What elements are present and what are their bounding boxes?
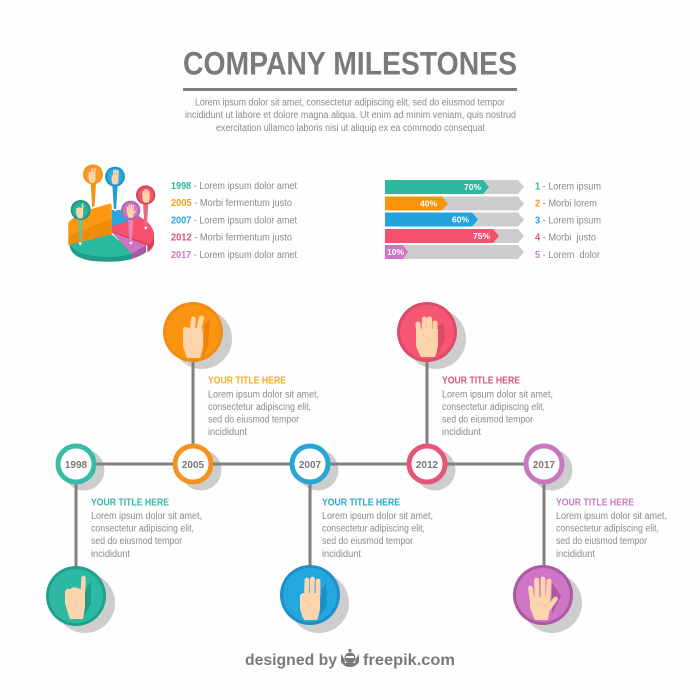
- text block 2005: [208, 376, 319, 438]
- bar label 3: 3 - Lorem ipsum: [535, 216, 601, 226]
- text block 2012: Lorem ipsum dolor sit amet,: [442, 390, 553, 400]
- pin: purple: [121, 201, 140, 245]
- bar 75%: 75%: [473, 231, 490, 241]
- bar label 1: 1 - Lorem ipsum: [535, 182, 601, 192]
- text block 1998: consectetur adipiscing elit,: [91, 524, 194, 534]
- heading 2017: YOUR TITLE HERE: [556, 498, 634, 508]
- pie slice: pink: [112, 217, 154, 252]
- progress bars: [385, 180, 524, 259]
- text block 2017: incididunt: [556, 549, 595, 560]
- icon: pink hand, four fingers: [397, 302, 457, 362]
- intro paragraph: exercitation ullamco laboris nisi ut aliquip ex ea commodo consequat: [216, 123, 485, 134]
- text block 2007: sed do eiusmod tempor: [322, 536, 414, 547]
- text block 2017: sed do eiusmod tempor: [556, 536, 648, 547]
- text block 2007: [322, 498, 433, 560]
- legend row 1998: 1998 - Lorem ipsum dolor amet: [171, 181, 297, 192]
- intro paragraph: Lorem ipsum dolor sit amet, consectetur adipiscing elit, sed do eiusmod tempor: [195, 98, 506, 108]
- text block 2007: incididunt: [322, 549, 361, 560]
- text block 1998: Lorem ipsum dolor sit amet,: [91, 511, 202, 522]
- milestone 2007 node: 2007: [299, 460, 322, 471]
- milestone 2017 node: [526, 446, 562, 482]
- text block 2005: Lorem ipsum dolor sit amet,: [208, 390, 319, 400]
- milestone 2005 node: 2005: [182, 460, 205, 471]
- legend row 2012: 2012 - Morbi fermentum justo: [171, 232, 293, 244]
- timeline lines: [76, 355, 544, 572]
- icon: orange hand, two fingers: [163, 302, 223, 362]
- bar 40%: 40%: [420, 198, 437, 208]
- milestone 2017 node: 2017: [533, 460, 556, 471]
- legend row 2007: 2007 - Lorem ipsum dolor amet: [171, 216, 297, 226]
- text block 2005: consectetur adipiscing elit,: [208, 402, 311, 413]
- text block 2007: consectetur adipiscing elit,: [322, 524, 425, 534]
- milestone 2012 node: 2012: [416, 460, 439, 471]
- text block 1998: sed do eiusmod tempor: [91, 536, 183, 547]
- pie slice: blue: [112, 210, 141, 226]
- text block 2005: incididunt: [208, 427, 247, 438]
- heading 2012: YOUR TITLE HERE: [442, 376, 520, 386]
- heading 2007: YOUR TITLE HERE: [322, 498, 400, 508]
- circle drop shadows: [55, 309, 582, 633]
- text block 2012: sed do eiusmod tempor: [442, 414, 534, 426]
- text block 2012: incididunt: [442, 427, 481, 438]
- legend row 2005: 2005 - Morbi fermentum justo: [171, 198, 293, 209]
- pin: orange: [83, 164, 103, 210]
- intro paragraph: [185, 98, 516, 134]
- title underline: [183, 88, 517, 91]
- pie slice: purple: [112, 232, 146, 259]
- footer credit: [245, 649, 455, 669]
- icon: purple hand, five fingers: [513, 565, 573, 625]
- pin: teal: [71, 200, 91, 245]
- text block 2012: consectetur adipiscing elit,: [442, 402, 545, 413]
- icon: teal hand, one finger: [46, 566, 106, 626]
- text block 2012: [442, 376, 553, 438]
- legend: years: [171, 181, 297, 261]
- pie slice: orange: [68, 203, 112, 245]
- heading 2005: YOUR TITLE HERE: [208, 376, 286, 386]
- text block 2005: sed do eiusmod tempor: [208, 414, 300, 426]
- text block 1998: incididunt: [91, 549, 130, 560]
- bar 60%: 60%: [452, 214, 469, 224]
- text block 2007: Lorem ipsum dolor sit amet,: [322, 511, 433, 522]
- milestone 2005 node: [175, 446, 211, 482]
- bar label 5: 5 - Lorem dolor: [535, 250, 601, 261]
- footer credit: designed by: [245, 652, 337, 669]
- text block 2017: Lorem ipsum dolor sit amet,: [556, 511, 667, 522]
- legend: bars: [535, 182, 601, 261]
- text block 1998: [91, 498, 202, 560]
- icon: freepik logo: [341, 649, 359, 667]
- intro paragraph: incididunt ut labore et dolore magna aliqua. Ut enim ad minim veniam, quis nostrud: [185, 110, 516, 121]
- milestone 1998 node: [58, 446, 94, 482]
- footer credit: freepik.com: [363, 652, 455, 669]
- text block 2017: consectetur adipiscing elit,: [556, 524, 659, 534]
- title: COMPANY MILESTONES: [183, 46, 517, 82]
- pie slice: teal: [69, 234, 132, 262]
- legend row 2017: 2017 - Lorem ipsum dolor amet: [171, 250, 297, 261]
- icon: blue hand, three fingers: [280, 565, 340, 625]
- heading 1998: YOUR TITLE HERE: [91, 498, 169, 508]
- 3D pie chart with hand pins: [68, 164, 155, 262]
- milestone 2012 node: [409, 446, 445, 482]
- pin: blue: [105, 167, 125, 212]
- pin: pink: [136, 185, 155, 230]
- text block 2017: [556, 498, 667, 560]
- bar 70%: 70%: [464, 182, 481, 192]
- bar label 2: 2 - Morbi lorem: [535, 198, 597, 210]
- bar 10%: 10%: [387, 247, 404, 257]
- milestone 2007 node: [292, 446, 328, 482]
- milestone 1998 node: 1998: [65, 460, 88, 471]
- bar label 4: 4 - Morbi justo: [535, 232, 597, 244]
